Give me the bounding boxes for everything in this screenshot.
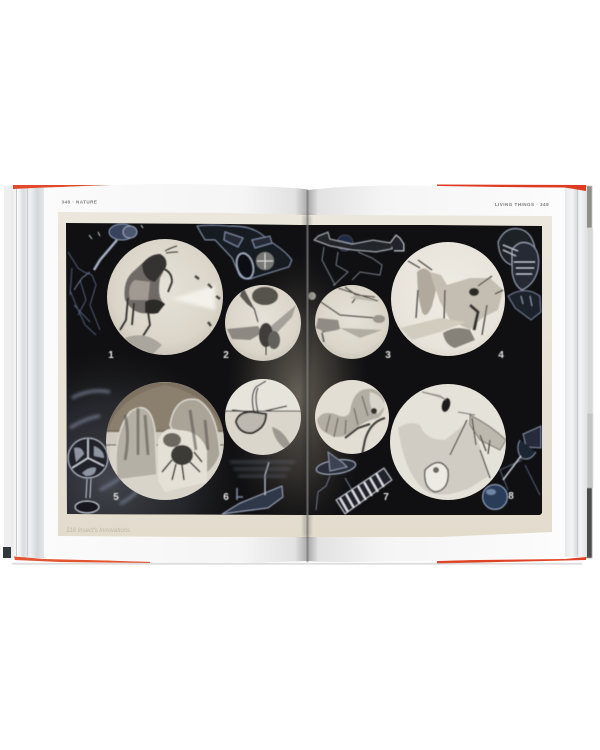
- plate numbers: 7: [383, 492, 389, 503]
- chalk drawing: mariachi with accordion: [315, 452, 392, 514]
- right page: [308, 186, 565, 562]
- plate numbers: 5: [113, 492, 119, 503]
- plate numbers: 6: [223, 492, 229, 503]
- plate numbers: 3: [385, 350, 391, 361]
- running head: right: LIVING THINGS · 349: [495, 202, 549, 207]
- disc 4: two ants and hand: [391, 242, 505, 356]
- running head: left: 348 · NATURE: [62, 200, 97, 204]
- disc 3: flying insects with clubs: [315, 285, 389, 359]
- plate black background: [66, 223, 542, 515]
- disc 8: ant with scroll: [390, 384, 506, 500]
- plate numbers: 8: [508, 491, 514, 502]
- plate numbers: 1: [108, 350, 114, 361]
- chalk drawing: man with bubble pipe: [482, 426, 541, 510]
- plate shading: [66, 276, 357, 514]
- handwritten plate caption: 318 Insect's Innovations: [66, 528, 130, 534]
- disc 7: caterpillar: [315, 380, 389, 455]
- gutter line: [306, 190, 308, 562]
- chalk drawing: knights helmets: [498, 229, 541, 320]
- book spread illustration: [3, 184, 594, 565]
- plate paper: [58, 212, 552, 537]
- plate numbers: 2: [223, 350, 229, 361]
- chalk drawing: soldier with bazooka: [314, 232, 404, 285]
- gutter shadow on plate: [303, 215, 311, 537]
- disc 5: insect in honeycomb: [105, 382, 225, 500]
- book block: covers and page edges: [3, 186, 593, 558]
- chalk drawing: man with microscope top left: [68, 224, 143, 335]
- plate numbers: 4: [498, 350, 504, 361]
- disc 6: insect with honeycomb egg: [225, 379, 301, 455]
- cover strip: orange bottom right: [437, 557, 586, 564]
- chalk drawing: submarine: [222, 462, 295, 514]
- cover strip: orange top right: [437, 184, 586, 191]
- shadow below book: [12, 563, 582, 564]
- left page: [44, 184, 308, 563]
- cover strip: orange bottom left: [14, 556, 150, 563]
- chalk drawing: fan: [68, 438, 108, 513]
- disc 2: beetles: [225, 285, 301, 361]
- chalk drawing: blurred swooshes around disc 5: [70, 391, 140, 504]
- chalk drawing: car: [197, 225, 292, 281]
- cover strip: orange top left: [13, 185, 150, 189]
- club tip outside disc 3: [308, 292, 316, 300]
- disc 1: insect with spray: [107, 239, 223, 355]
- plate numbers: [108, 350, 514, 503]
